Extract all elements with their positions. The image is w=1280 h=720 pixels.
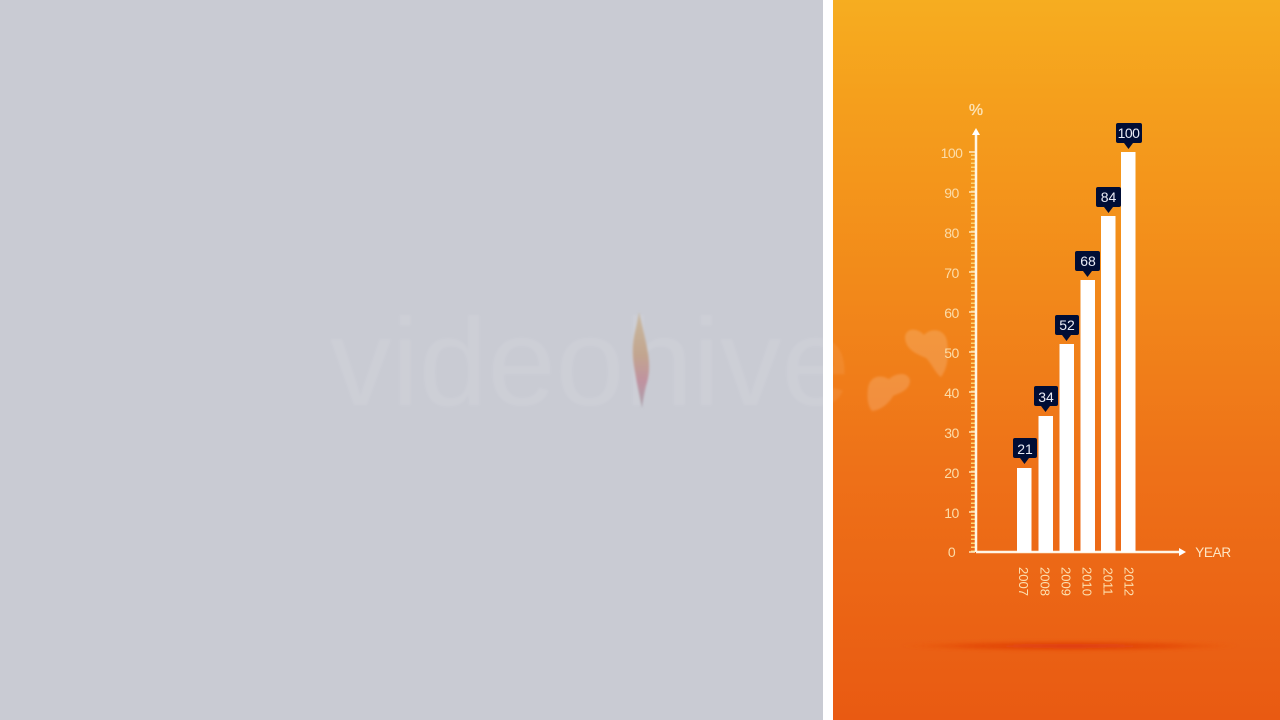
x axis arrowhead (1179, 548, 1186, 556)
value labels: 84 (1101, 189, 1116, 205)
year labels: 2008 (1038, 567, 1052, 596)
panel: grey left background (0, 0, 823, 720)
value labels (1017, 125, 1140, 457)
year labels: 2007 (1016, 567, 1031, 596)
y axis unit label: % (969, 102, 983, 119)
bar chart (941, 102, 1231, 596)
y axis tick labels (941, 145, 963, 560)
watermark: videohive wordmark: videohive (330, 294, 850, 432)
leaf upper (905, 330, 948, 377)
panel: orange chart background (833, 0, 1280, 720)
value labels: 21 (1017, 441, 1033, 457)
y axis tick labels: 90 (944, 185, 959, 201)
y axis minor ticks (971, 152, 975, 552)
y axis tick labels: 0 (948, 544, 956, 560)
watermark: leaf logo (867, 330, 948, 411)
y axis tick labels: 100 (941, 145, 963, 161)
y axis line and arrow (976, 134, 1180, 552)
value labels: 68 (1080, 253, 1096, 269)
bars (1017, 152, 1136, 552)
leaf lower (867, 374, 910, 411)
white divider strip (823, 0, 833, 720)
y axis major ticks (969, 152, 975, 552)
y axis tick labels: 60 (944, 305, 959, 321)
value labels: 52 (1059, 317, 1075, 333)
y axis tick labels: 40 (944, 385, 959, 401)
y axis arrowhead (972, 128, 980, 135)
value labels: 34 (1038, 389, 1054, 405)
x axis title: YEAR (1195, 545, 1231, 560)
y axis tick labels: 50 (944, 345, 959, 361)
year labels (1016, 567, 1136, 596)
year labels: 2011 (1100, 568, 1116, 595)
ground shadow under chart (898, 640, 1242, 652)
year labels: 2009 (1058, 567, 1074, 596)
y axis tick labels: 80 (944, 225, 959, 241)
year labels: 2010 (1080, 567, 1094, 596)
y axis tick labels: 30 (944, 425, 959, 441)
y axis tick labels: 10 (944, 505, 959, 521)
value labels: 100 (1118, 125, 1140, 141)
y axis tick labels: 70 (944, 265, 959, 281)
icon: spinning petal (633, 312, 649, 408)
y axis tick labels: 20 (944, 465, 959, 481)
year labels: 2012 (1122, 567, 1136, 596)
value callouts (1013, 123, 1142, 464)
